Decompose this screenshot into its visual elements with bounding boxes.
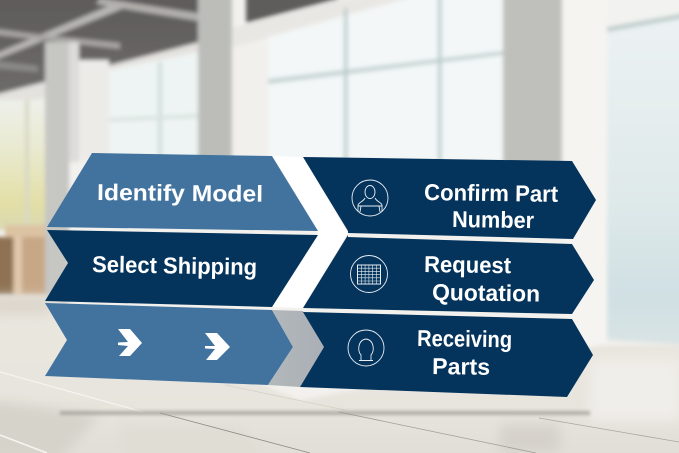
icon: person in circle [352, 180, 388, 216]
step: Request Quotation: Request [424, 251, 512, 278]
step: Select Shipping [45, 230, 318, 307]
step: Request Quotation [303, 235, 594, 314]
ground shadow [60, 411, 590, 415]
column 3 [503, 0, 562, 165]
right window [607, 15, 679, 345]
process chevrons, right column [300, 157, 596, 397]
step: Receiving Parts [300, 312, 593, 397]
step: Identify Model: Identify Model [97, 179, 263, 207]
icon: arrow 2 [205, 333, 230, 360]
process chevrons, left column [45, 153, 318, 385]
floor shading [0, 296, 679, 453]
white chevron gap [272, 156, 348, 308]
floor plank lines [0, 372, 679, 453]
step: Confirm Part Number: Number [452, 206, 534, 233]
cardboard boxes [0, 225, 47, 296]
icon: grid in circle [350, 256, 388, 292]
column 2 [198, 0, 232, 160]
ceiling [0, 0, 394, 100]
column 1 [45, 42, 69, 302]
icon: head outline in circle [348, 330, 384, 366]
step: arrows [45, 303, 293, 385]
middle window [76, 56, 112, 86]
floor [0, 296, 679, 453]
grey connector chevron [268, 310, 324, 387]
step: Request Quotation: Quotation [432, 279, 540, 307]
icon: arrow 1 [118, 329, 142, 356]
step: Confirm Part Number [303, 157, 596, 239]
step: Receiving Parts: Receiving [417, 325, 512, 352]
step: Confirm Part Number: Confirm Part [424, 179, 559, 207]
step: Identify Model [47, 153, 318, 231]
large window [268, 0, 503, 160]
left far window [0, 100, 45, 230]
step: Select Shipping: Select Shipping [92, 251, 257, 280]
step: Receiving Parts: Parts [432, 353, 490, 380]
